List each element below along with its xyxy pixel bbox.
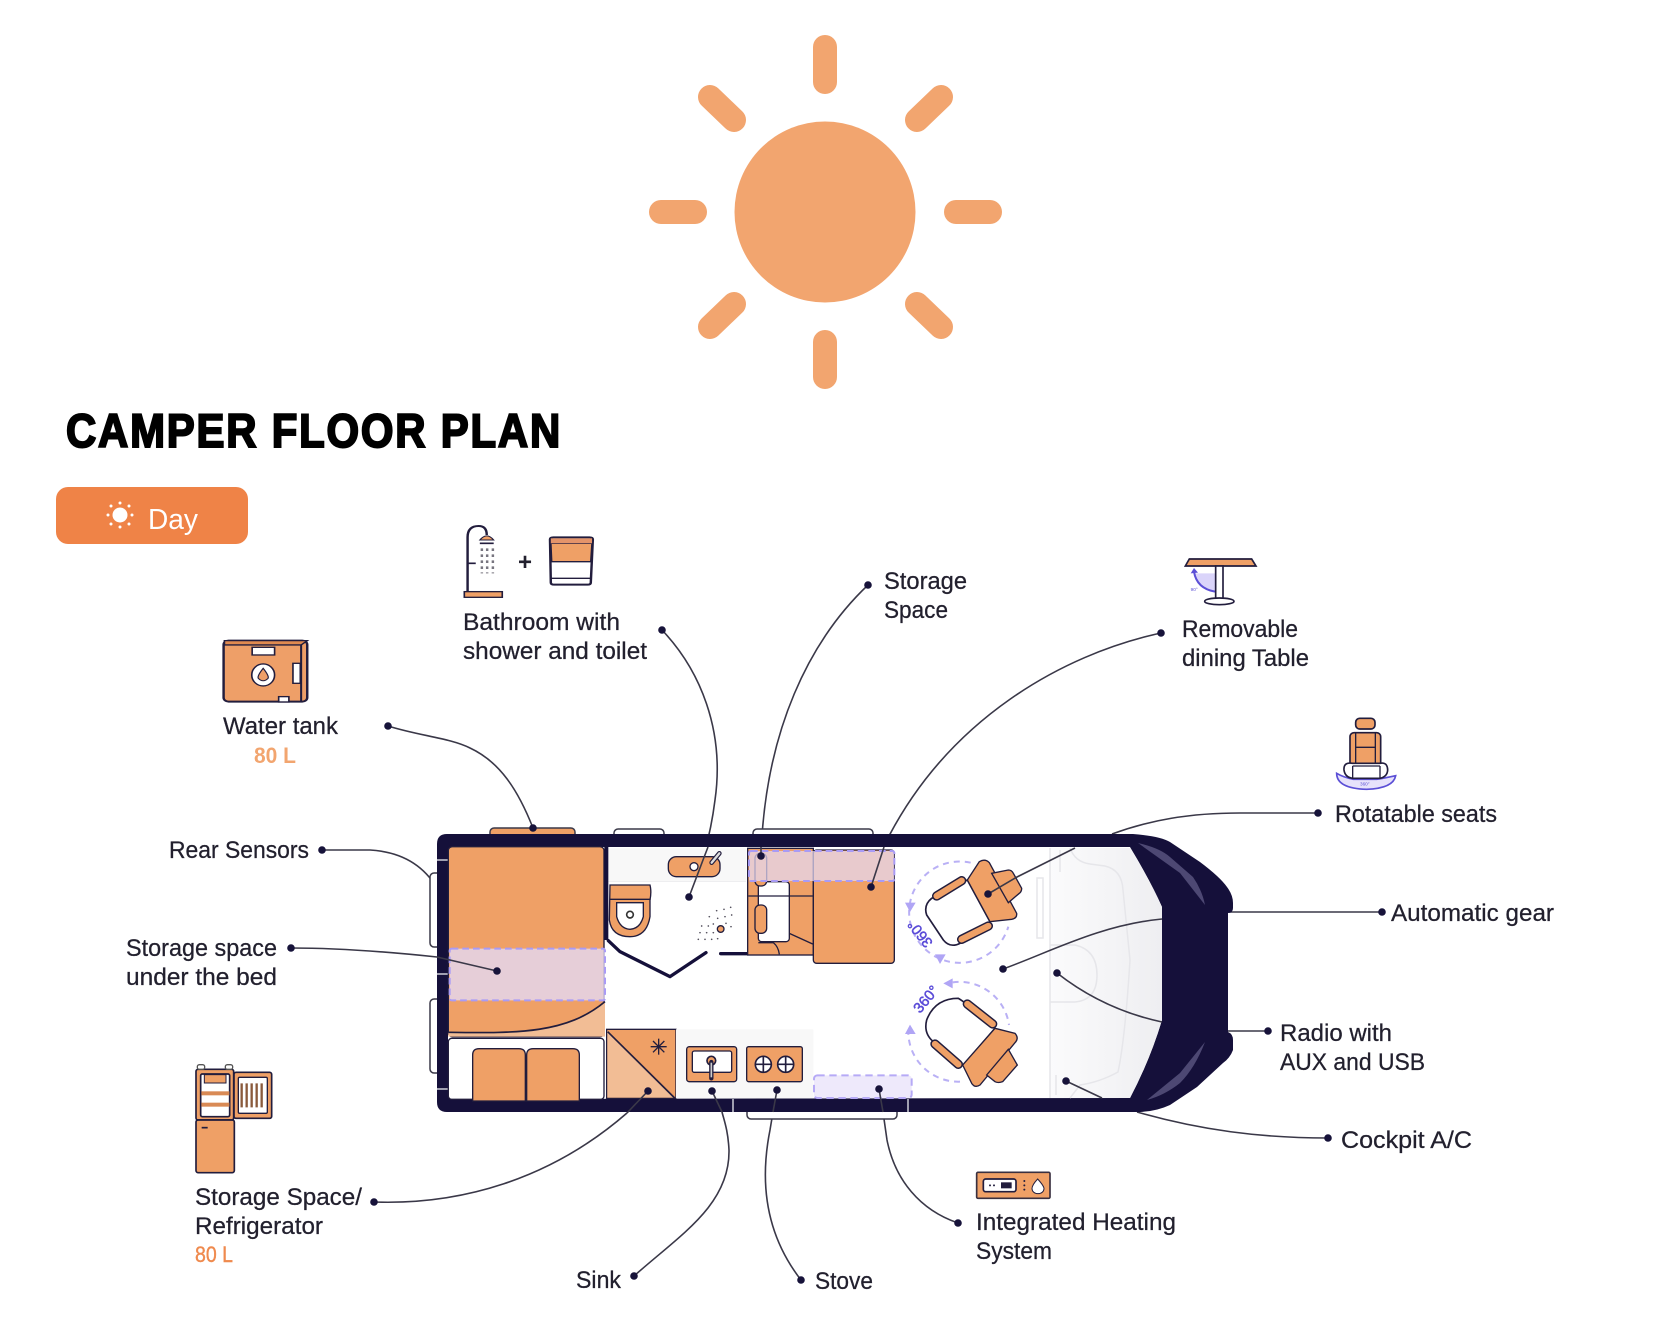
label: cockpit a/c: Cockpit A/C bbox=[1341, 1127, 1472, 1154]
plus sign: + bbox=[518, 549, 532, 576]
icon: large sun bbox=[661, 47, 990, 377]
bottom seat: 360° bbox=[911, 983, 943, 1017]
label: rear sensors: Rear Sensors bbox=[169, 837, 309, 864]
kitchen sink bbox=[687, 1047, 737, 1082]
label: stove: Stove bbox=[815, 1268, 873, 1295]
icon: shower bbox=[464, 526, 502, 597]
label: sink: Sink bbox=[576, 1267, 622, 1294]
van exterior attachments bbox=[430, 828, 897, 1119]
label: storage space under the bed: Storage space bbox=[126, 935, 277, 962]
label: water tank: 80 L bbox=[254, 743, 296, 768]
bathroom sink bbox=[668, 853, 720, 877]
leader lines inside the van bbox=[437, 847, 1162, 1113]
storage under the bed bbox=[450, 949, 605, 1000]
label: storage space refrigerator: Storage Space/ bbox=[195, 1184, 362, 1211]
dining table bbox=[813, 850, 894, 963]
top seat bbox=[905, 860, 1022, 964]
label: storage space: Space bbox=[884, 597, 948, 624]
bottom seat bbox=[905, 978, 1017, 1086]
label: storage space: Storage bbox=[884, 568, 967, 595]
label: removable dining table: dining Table bbox=[1182, 645, 1309, 672]
icon: heater panel bbox=[977, 1172, 1050, 1198]
label: radio: AUX and USB bbox=[1280, 1049, 1425, 1076]
leader lines outside the van bbox=[291, 585, 1382, 1280]
label: removable dining table: Removable bbox=[1182, 616, 1298, 643]
floor plan front: rotating seats bbox=[905, 860, 1022, 1086]
integrated heating zone bbox=[814, 1075, 912, 1098]
label: storage space refrigerator bbox=[195, 1184, 362, 1267]
icon: refrigerator bbox=[196, 1065, 272, 1173]
leader dots bbox=[287, 581, 1386, 1284]
label: storage space refrigerator: 80 L bbox=[195, 1242, 233, 1267]
label: water tank: Water tank bbox=[223, 713, 339, 740]
label: bathroom bbox=[463, 609, 647, 665]
label: radio: Radio with bbox=[1280, 1020, 1392, 1047]
label: removable dining table bbox=[1182, 616, 1309, 672]
label: storage space under the bed: under the bed bbox=[126, 964, 277, 991]
icon: rotatable seat bbox=[1337, 718, 1396, 789]
stove bbox=[747, 1047, 802, 1082]
storage above bench bbox=[749, 851, 894, 881]
day button bbox=[56, 487, 248, 544]
label: rotatable seats: Rotatable seats bbox=[1335, 801, 1497, 828]
icon: water tank bbox=[224, 641, 307, 702]
van body bbox=[437, 834, 1233, 1112]
dinette bench bbox=[748, 848, 813, 955]
label: bathroom: shower and toilet bbox=[463, 638, 647, 665]
icon: rotatable seat: 360° bbox=[1360, 782, 1370, 787]
label: storage space refrigerator: Refrigerator bbox=[195, 1213, 323, 1240]
label: automatic gear: Automatic gear bbox=[1391, 900, 1554, 927]
bathroom bbox=[604, 847, 748, 977]
icon: removable table bbox=[1185, 559, 1256, 605]
label: bathroom: Bathroom with bbox=[463, 609, 620, 636]
label: storage space bbox=[884, 568, 967, 624]
icon: toilet bbox=[550, 537, 593, 585]
bathroom door bbox=[608, 941, 748, 977]
bed bbox=[448, 847, 605, 1037]
title: CAMPER FLOOR PLAN bbox=[66, 404, 562, 457]
label: storage space under the bed bbox=[126, 935, 277, 991]
label: integrated heating system: Integrated Heating bbox=[976, 1209, 1176, 1236]
day button: Day bbox=[148, 504, 198, 536]
rear bench cushions bbox=[448, 1038, 604, 1101]
label: radio bbox=[1280, 1020, 1425, 1076]
refrigerator cabinet bbox=[607, 1029, 676, 1098]
icon: removable table: 90° bbox=[1191, 587, 1198, 592]
top seat: 360° bbox=[905, 916, 936, 950]
label: integrated heating system bbox=[976, 1209, 1176, 1265]
kitchen counter bbox=[676, 1029, 813, 1098]
label: water tank bbox=[223, 713, 339, 768]
shower drain and spray bbox=[697, 906, 732, 940]
toilet bbox=[609, 885, 651, 937]
label: integrated heating system: System bbox=[976, 1238, 1052, 1265]
floor plan rear: bed, bathroom, kitchen bbox=[448, 847, 912, 1101]
